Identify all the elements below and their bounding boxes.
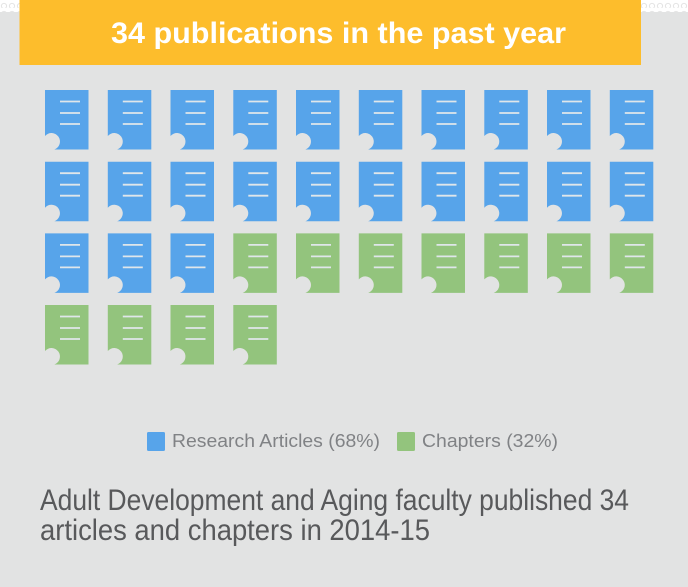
top-right paper strip <box>641 0 688 12</box>
row 3: research articles and chapters <box>45 233 653 293</box>
title banner: 34 publications in the past year <box>111 17 566 50</box>
title banner <box>20 0 641 65</box>
summary text: articles and chapters in 2014-15 <box>40 514 430 547</box>
row 2: research articles <box>45 162 653 221</box>
document icon grid <box>45 90 653 364</box>
row 4: chapters <box>45 305 277 364</box>
legend: chapters: Chapters (32%) <box>422 431 558 451</box>
summary text <box>40 484 629 547</box>
row 1: research articles <box>45 90 653 150</box>
legend <box>147 431 558 451</box>
top-left paper strip <box>0 0 20 12</box>
legend: research articles: Research Articles (68%) <box>172 431 380 451</box>
